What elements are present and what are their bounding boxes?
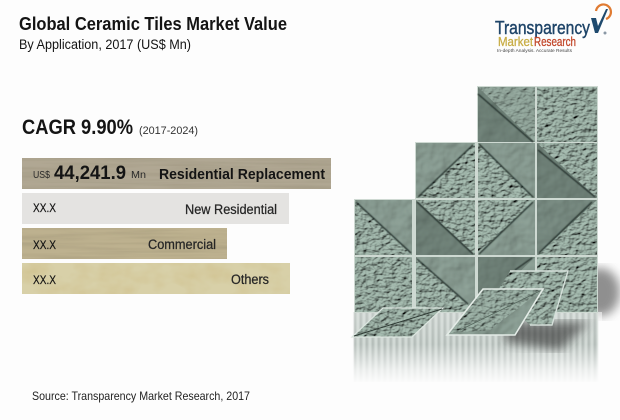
logo wordmark: Transparency [495, 18, 590, 38]
source note: Source: Transparency Market Research, 2017 [32, 389, 250, 403]
tile grid backing [354, 86, 598, 313]
bar: New Residential: New Residential [185, 202, 277, 217]
bar: Commercial [22, 228, 227, 259]
logo tagline: In-depth Analysis. Accurate Results [497, 48, 573, 53]
tile textured surfaces [355, 87, 597, 312]
bar: Commercial: Commercial [148, 237, 216, 252]
hammered tile halves [355, 87, 597, 312]
bar: Others: XX.X [33, 275, 56, 287]
bar: Residential Replacement: US$ [33, 169, 50, 181]
bar: Others [22, 263, 290, 294]
bar: New Residential [22, 193, 289, 224]
title: Global Ceramic Tiles Market Value [19, 14, 287, 34]
logo: Transparency Market Research [495, 4, 611, 53]
tile reflection [350, 312, 602, 384]
logo word: Research: Research [534, 35, 576, 49]
bar chart: market value by application [22, 158, 331, 294]
leaning tile back [495, 271, 568, 325]
logo word: Market: Market [498, 35, 533, 49]
subtitle: By Application, 2017 (US$ Mn) [19, 37, 191, 52]
bar: Others: Others [231, 272, 269, 287]
diagonal grooves [356, 94, 595, 304]
image: ceramic tile wall [350, 86, 620, 384]
CAGR period: (2017-2024) [139, 125, 198, 137]
bar: Residential Replacement: Residential Replacement [159, 166, 325, 183]
bar: Residential Replacement: Mn [131, 169, 146, 181]
leaning tile front [447, 289, 543, 335]
tile shadow [580, 268, 620, 316]
bar: New Residential: XX.X [33, 203, 56, 215]
bar: Commercial: XX.X [33, 240, 56, 252]
flat tile left [352, 308, 443, 337]
logo icon: check mark with orange arc [591, 4, 611, 34]
bar: Residential Replacement: 44,241.9 [54, 163, 126, 184]
CAGR heading [22, 116, 198, 139]
CAGR value: CAGR 9.90% [22, 116, 133, 139]
dark tile halves [416, 87, 597, 312]
bar: Residential Replacement [22, 158, 331, 189]
